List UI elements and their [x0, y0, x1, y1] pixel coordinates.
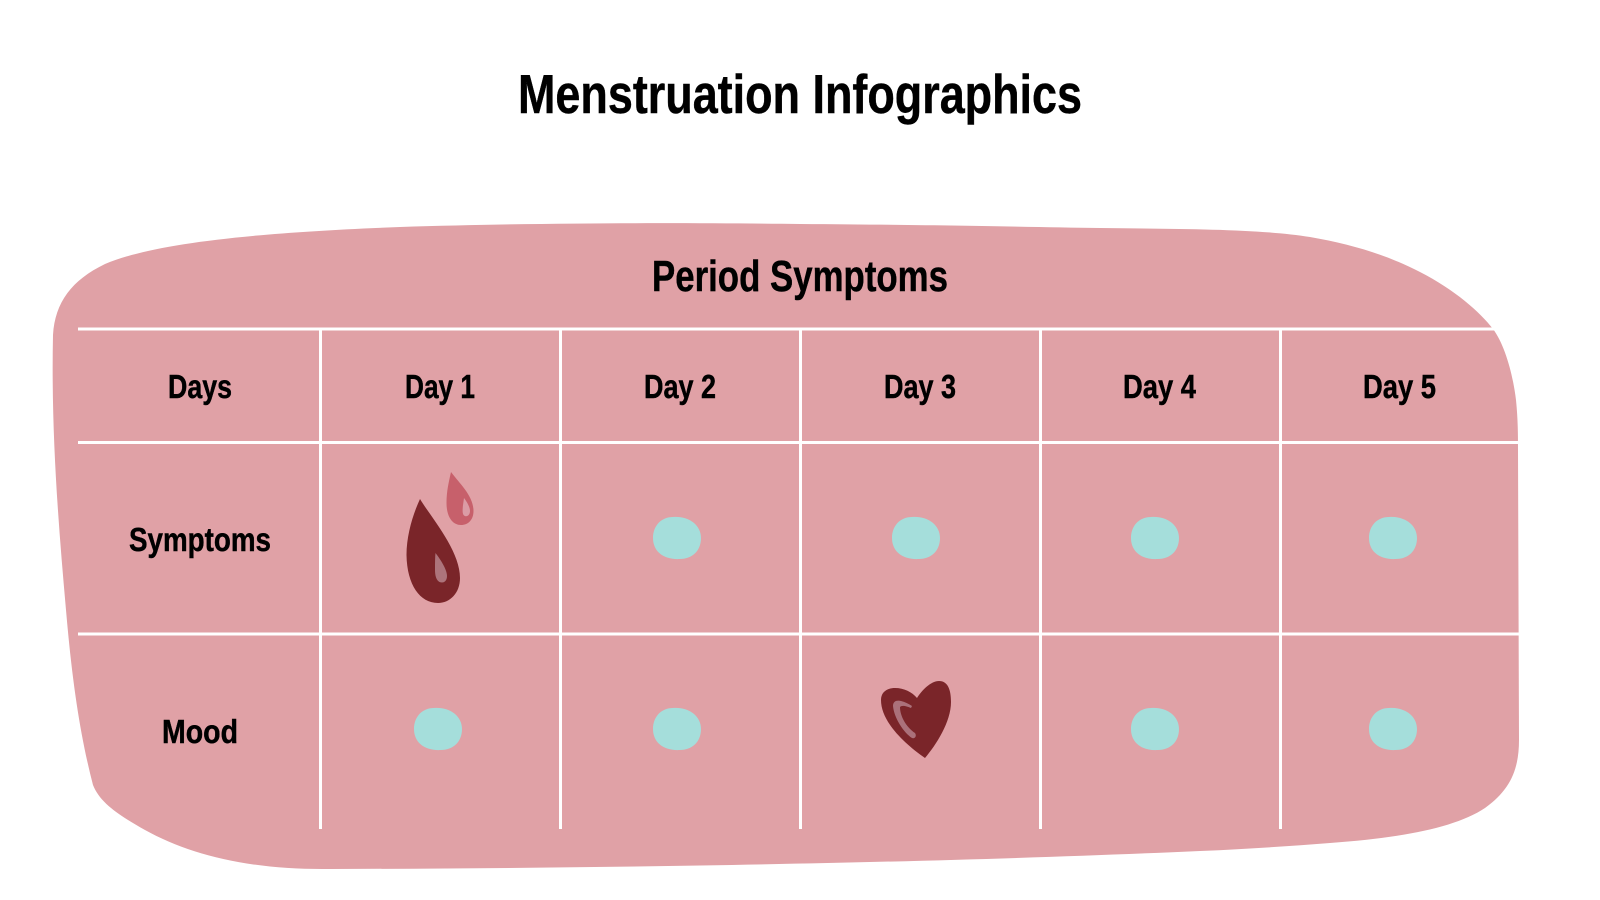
header row: Day 4 — [1123, 368, 1197, 405]
marker: day 3 symptoms — [892, 517, 940, 559]
row label: mood: Mood — [162, 713, 238, 750]
marker: day 5 symptoms — [1369, 517, 1417, 559]
header row — [168, 368, 1436, 405]
header row: Day 2 — [644, 368, 716, 405]
marker: day 5 mood — [1369, 708, 1417, 750]
header row: Day 3 — [884, 368, 956, 405]
icon: blood drops — [406, 472, 474, 603]
marker: day 4 symptoms — [1131, 517, 1179, 559]
panel: period symptoms table — [53, 223, 1519, 869]
icon: heart — [881, 681, 951, 758]
header row: Day 5 — [1363, 368, 1436, 405]
table grid — [78, 328, 1519, 829]
header row: Day 1 — [405, 368, 475, 405]
header row: Days — [168, 368, 232, 405]
marker: day 2 symptoms — [653, 517, 701, 559]
section heading: Period Symptoms — [652, 252, 948, 301]
row label: symptoms: Symptoms — [129, 521, 271, 558]
marker: day 1 mood — [414, 708, 462, 750]
row: symptoms — [129, 472, 1417, 603]
marker: day 2 mood — [653, 708, 701, 750]
row: mood — [162, 681, 1417, 758]
marker: day 4 mood — [1131, 708, 1179, 750]
title: Menstruation Infographics — [518, 63, 1082, 125]
panel background blob — [53, 223, 1519, 869]
